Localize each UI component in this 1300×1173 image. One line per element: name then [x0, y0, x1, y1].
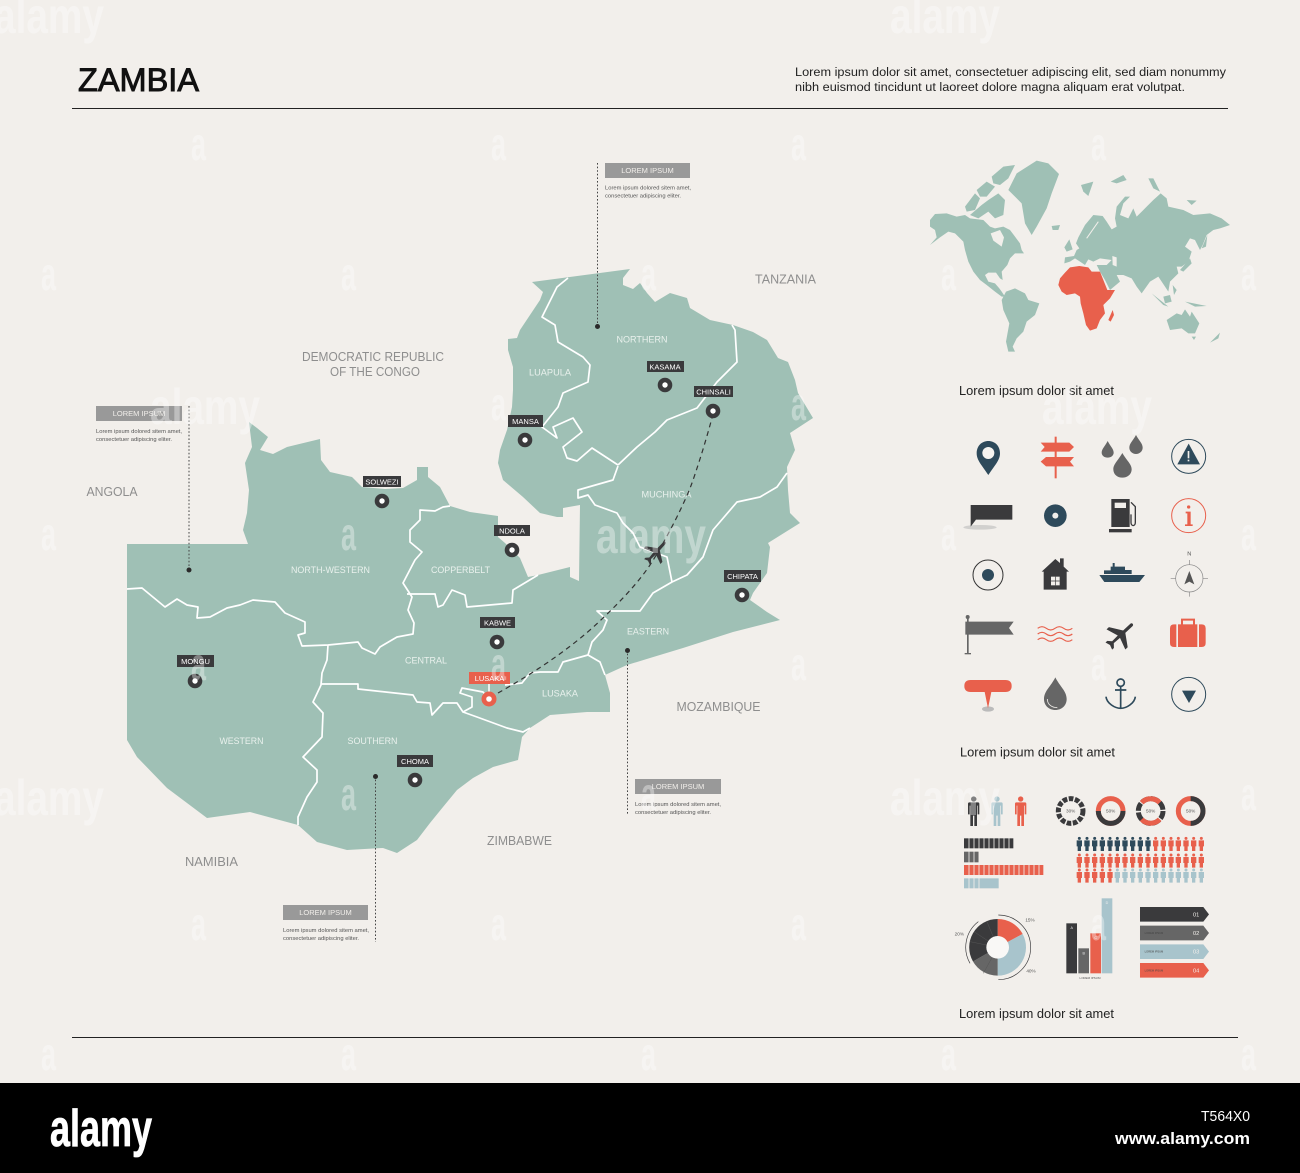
watermarks: a	[791, 638, 806, 690]
callout: west	[96, 406, 192, 572]
watermarks: alamy	[150, 379, 260, 435]
numbered arrows: 02	[1193, 931, 1199, 937]
ring charts	[1058, 799, 1203, 823]
icon: disc	[1044, 504, 1067, 527]
city: Choma: CHOMA	[401, 757, 429, 766]
watermarks: a	[1091, 118, 1106, 170]
city: Mansa: MANSA	[512, 417, 539, 426]
watermarks: a	[1091, 898, 1106, 950]
city: Ndola	[494, 525, 530, 557]
donut chart: 20%	[955, 932, 964, 937]
province boundaries	[127, 278, 787, 825]
neighbouring country labels: DEMOCRATIC REPUBLIC	[302, 349, 444, 364]
icon: house	[1042, 558, 1069, 590]
watermarks: alamy	[596, 508, 706, 564]
numbered arrows: 03	[1193, 950, 1199, 956]
caption: world map: Lorem ipsum dolor sit amet	[959, 384, 1115, 398]
icon: compass: N	[1187, 552, 1191, 558]
infographic charts	[955, 796, 1209, 980]
title: ZAMBIA	[78, 62, 200, 98]
province labels: EASTERN	[627, 626, 669, 638]
bar chart: C	[1094, 936, 1097, 940]
icon: speech flag	[963, 505, 1012, 530]
watermarks: a	[341, 1028, 356, 1080]
neighbouring country labels: ANGOLA	[86, 484, 138, 499]
city: Kasama	[647, 361, 684, 392]
watermarks: a	[491, 638, 506, 690]
world locator map	[930, 161, 1230, 352]
neighbouring country labels: OF THE CONGO	[330, 364, 420, 379]
watermarks: a	[1091, 638, 1106, 690]
city: Lusaka capital: LUSAKA	[475, 674, 504, 683]
numbered arrows: LOREM IPSUM	[1145, 931, 1163, 935]
neighbouring country labels: NAMIBIA	[185, 854, 238, 869]
neighbouring country labels: ZIMBABWE	[487, 833, 552, 848]
city: Mongu: MONGU	[181, 657, 210, 666]
watermarks: a	[191, 118, 206, 170]
ring percentages	[1066, 809, 1195, 814]
icon: target	[973, 560, 1003, 590]
province labels: SOUTHERN	[348, 736, 398, 747]
watermarks: a	[641, 768, 656, 820]
landmasses	[930, 161, 1230, 352]
watermarks: a	[41, 1028, 56, 1080]
icon: ship	[1099, 563, 1145, 582]
donut chart: 15%	[1025, 917, 1035, 922]
watermarks: a	[941, 248, 956, 300]
icon: drops	[1102, 435, 1143, 478]
watermarks: a	[791, 898, 806, 950]
footer band	[0, 1083, 1300, 1173]
city: Kabwe: KABWE	[484, 618, 511, 628]
icon: down arrow	[1172, 677, 1206, 711]
watermarks: a	[41, 248, 56, 300]
ring percentages: 50%	[1106, 809, 1115, 814]
province labels: NORTHERN	[616, 334, 668, 346]
icon: warning	[1172, 439, 1206, 473]
watermarks: a	[341, 768, 356, 820]
donut chart	[955, 915, 1036, 980]
province labels: NORTH-WESTERN	[291, 565, 370, 576]
watermarks: a	[641, 1028, 656, 1080]
bar chart: B	[1082, 951, 1085, 955]
watermarks: a	[191, 638, 206, 690]
city: Chinsali: CHINSALI	[696, 388, 731, 396]
callout: east: LOREM IPSUM	[652, 782, 704, 791]
icon: plane	[639, 534, 674, 570]
callout: south: consectetuer adipiscing eliter.	[283, 936, 359, 942]
icon: signpost	[1041, 437, 1074, 478]
callout: north: consectetuer adipiscing eliter.	[605, 194, 681, 200]
watermarks: a	[191, 898, 206, 950]
city: Ndola: NDOLA	[499, 526, 525, 536]
watermarks: a	[1241, 248, 1256, 300]
caption: icons: Lorem ipsum dolor sit amet	[960, 746, 1116, 760]
callout: east	[625, 648, 721, 816]
icon grid	[963, 435, 1208, 712]
ring percentages: 50%	[1146, 809, 1155, 814]
city: Kasama: KASAMA	[649, 362, 681, 372]
callout: east: consectetuer adipiscing eliter.	[635, 810, 711, 816]
neighbouring country labels: MOZAMBIQUE	[676, 699, 761, 714]
province labels: COPPERBELT	[431, 565, 490, 576]
city: Solwezi: SOLWEZI	[365, 478, 399, 486]
caption: charts: Lorem ipsum dolor sit amet	[959, 1007, 1115, 1021]
watermarks: a	[641, 248, 656, 300]
watermarks: a	[491, 378, 506, 430]
city: Choma	[397, 755, 433, 787]
icon: map pin	[977, 441, 1000, 475]
numbered arrows: LOREM IPSUM	[1145, 968, 1163, 972]
city: Mongu	[177, 655, 214, 688]
donut chart: 40%	[1026, 968, 1036, 973]
city: Mansa	[508, 415, 543, 447]
icon: anchor	[1106, 679, 1135, 708]
watermarks: a	[791, 378, 806, 430]
callout: west: LOREM IPSUM	[113, 409, 165, 418]
bar chart: D	[1106, 901, 1109, 905]
bar chart: LOREM IPSUM	[1080, 976, 1101, 980]
callout: south: LOREM IPSUM	[299, 908, 352, 917]
neighbouring country labels: TANZANIA	[755, 272, 816, 286]
icon: info	[1172, 499, 1206, 533]
city: Chipata	[724, 570, 761, 602]
watermarks: a	[41, 508, 56, 560]
numbered arrows: 01	[1193, 912, 1199, 918]
numbered arrows: 04	[1193, 968, 1199, 974]
icon: red pin	[964, 680, 1012, 712]
footer logo: alamy	[50, 1100, 152, 1158]
ring percentages: 30%	[1066, 809, 1075, 814]
watermarks: alamy	[890, 770, 1000, 826]
callout: east: Lorem ipsum dolored sitem amet,	[635, 802, 721, 808]
icon: flag	[965, 615, 1014, 654]
people grid	[1077, 837, 1204, 883]
city: Lusaka capital	[469, 672, 510, 706]
icon: suitcase	[1170, 620, 1206, 647]
ring percentages: 50%	[1186, 809, 1195, 814]
callout: west: Lorem ipsum dolored sitem amet,	[96, 429, 182, 435]
icon: compass	[1171, 552, 1208, 597]
image id: T564X0	[1201, 1109, 1250, 1125]
watermarks: a	[491, 898, 506, 950]
icon: fuel pump	[1109, 499, 1135, 532]
callout: north: LOREM IPSUM	[621, 166, 674, 175]
watermarks: a	[341, 508, 356, 560]
city: Solwezi	[363, 476, 401, 508]
watermarks: alamy	[1042, 379, 1152, 435]
watermarks: a	[1241, 768, 1256, 820]
icon: three persons	[968, 796, 1026, 826]
province labels: LUSAKA	[542, 688, 579, 700]
map of Zambia	[127, 269, 813, 853]
province labels: MUCHINGA	[642, 490, 692, 500]
Africa highlight	[1058, 266, 1115, 331]
bar chart	[1066, 898, 1112, 980]
icon: airplane	[1099, 614, 1142, 656]
watermarks: a	[791, 118, 806, 170]
callout: south: Lorem ipsum dolored sitem amet,	[283, 928, 369, 934]
icon: waves	[1038, 627, 1072, 641]
horizontal segmented bars	[964, 838, 1043, 889]
header description: nibh euismod tincidunt ut laoreet dolore magna aliquam erat volutpat.	[795, 80, 1185, 94]
city: Kabwe	[480, 617, 515, 649]
icon: drop	[1044, 677, 1067, 710]
country outline	[127, 269, 813, 853]
numbered arrows: LOREM IPSUM	[1145, 950, 1163, 954]
watermarks: a	[941, 1028, 956, 1080]
province labels: WESTERN	[220, 736, 264, 747]
watermarks: a	[1241, 508, 1256, 560]
watermarks: a	[1241, 1028, 1256, 1080]
neighbouring country labels	[86, 272, 816, 869]
callout: north	[595, 163, 691, 329]
numbered arrows	[1140, 907, 1209, 978]
watermarks: a	[941, 508, 956, 560]
flight route	[498, 418, 712, 693]
watermarks: a	[341, 248, 356, 300]
callout: west: consectetuer adipiscing eliter.	[96, 437, 172, 443]
inland water and channels	[991, 230, 1117, 267]
callout: south	[283, 774, 378, 942]
header description	[795, 65, 1227, 94]
website: www.alamy.com	[1114, 1129, 1250, 1148]
callout: north: Lorem ipsum dolored sitem amet,	[605, 186, 691, 192]
province labels	[220, 334, 692, 747]
watermarks: a	[491, 118, 506, 170]
city: Chinsali	[694, 386, 733, 418]
bar chart: A	[1070, 926, 1073, 930]
province labels: LUAPULA	[529, 368, 572, 378]
city: Chipata: CHIPATA	[727, 572, 758, 581]
header description: Lorem ipsum dolor sit amet, consectetuer adipiscing elit, sed diam nonummy	[795, 65, 1227, 79]
province labels: CENTRAL	[405, 656, 447, 666]
